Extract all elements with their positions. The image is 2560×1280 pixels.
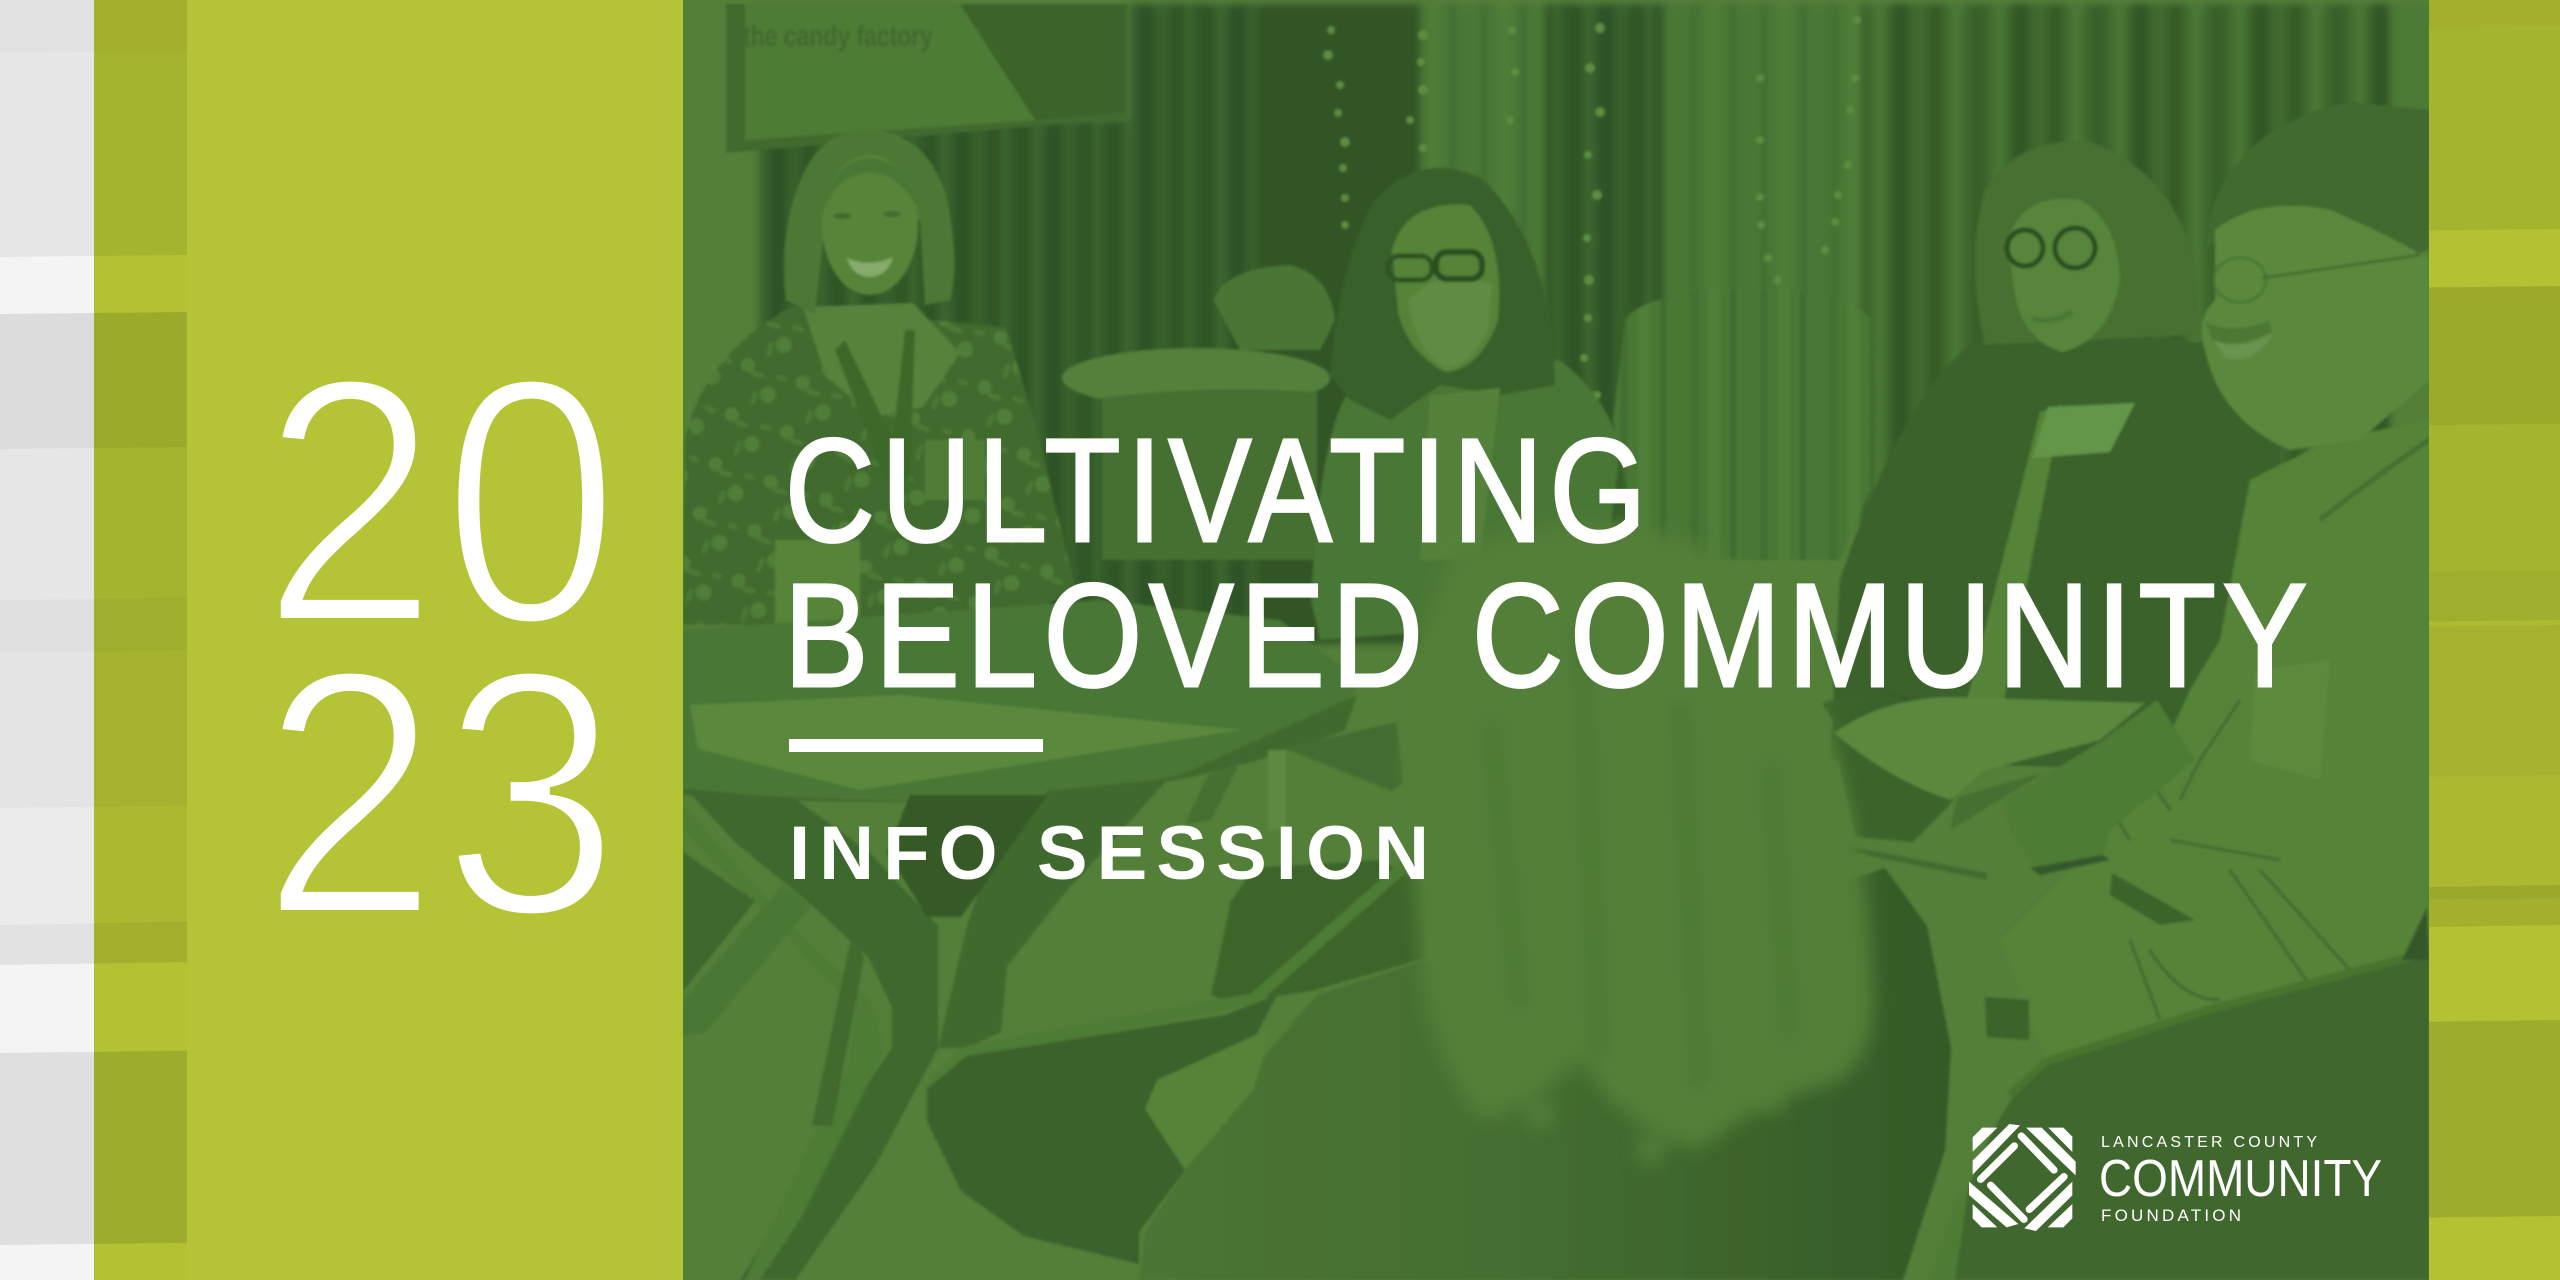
logo: Lancaster County Community Foundation <box>1969 1124 2382 1231</box>
year: 20 over 23 <box>261 305 619 988</box>
photo: background chairs and round table <box>1062 265 1874 560</box>
title: Cultivating Beloved Community: BELOVED COMMUNITY <box>784 554 2314 718</box>
subtitle: info session: INFO SESSION <box>789 811 1429 896</box>
panel: green duotone photo of community discussion <box>683 0 2430 1280</box>
title: Cultivating Beloved Community: CULTIVATING <box>785 409 1653 573</box>
photo: wall screen <box>726 4 1128 153</box>
panel: lime year column <box>187 0 683 1280</box>
photo: hands, jeans and papers <box>1817 690 2195 1040</box>
photo: wall screen: the candy factory <box>743 20 933 53</box>
photo: curtains and back wall <box>758 4 2430 644</box>
year: 20 over 23: 23 <box>261 597 619 988</box>
logo wordmark: COMMUNITY <box>2099 1150 2382 1208</box>
photo: string lights <box>1323 16 1861 399</box>
logo wordmark: FOUNDATION <box>2101 1206 2241 1225</box>
title: Cultivating Beloved Community <box>784 409 2314 718</box>
photo: foreground round table with papers and legs <box>683 600 1403 1280</box>
photo: woman at left with floral blouse <box>683 130 1076 630</box>
photo: foreground chair and seated person's back <box>927 832 2429 1280</box>
photo: smiling man at right <box>2000 102 2429 1060</box>
year: 20 over 23: 20 <box>261 305 619 696</box>
logo wordmark: LANCASTER COUNTY <box>2101 1134 2317 1151</box>
photo: masked woman with glasses <box>1311 168 1620 640</box>
divider rule under title <box>789 739 1043 752</box>
photo: woman in dark cardigan with name tag <box>1830 141 2280 770</box>
photo: blurred hair in the foreground <box>1405 523 1873 1164</box>
logo wordmark <box>2099 1134 2382 1225</box>
icon: woven diamond mark <box>1969 1124 2076 1231</box>
